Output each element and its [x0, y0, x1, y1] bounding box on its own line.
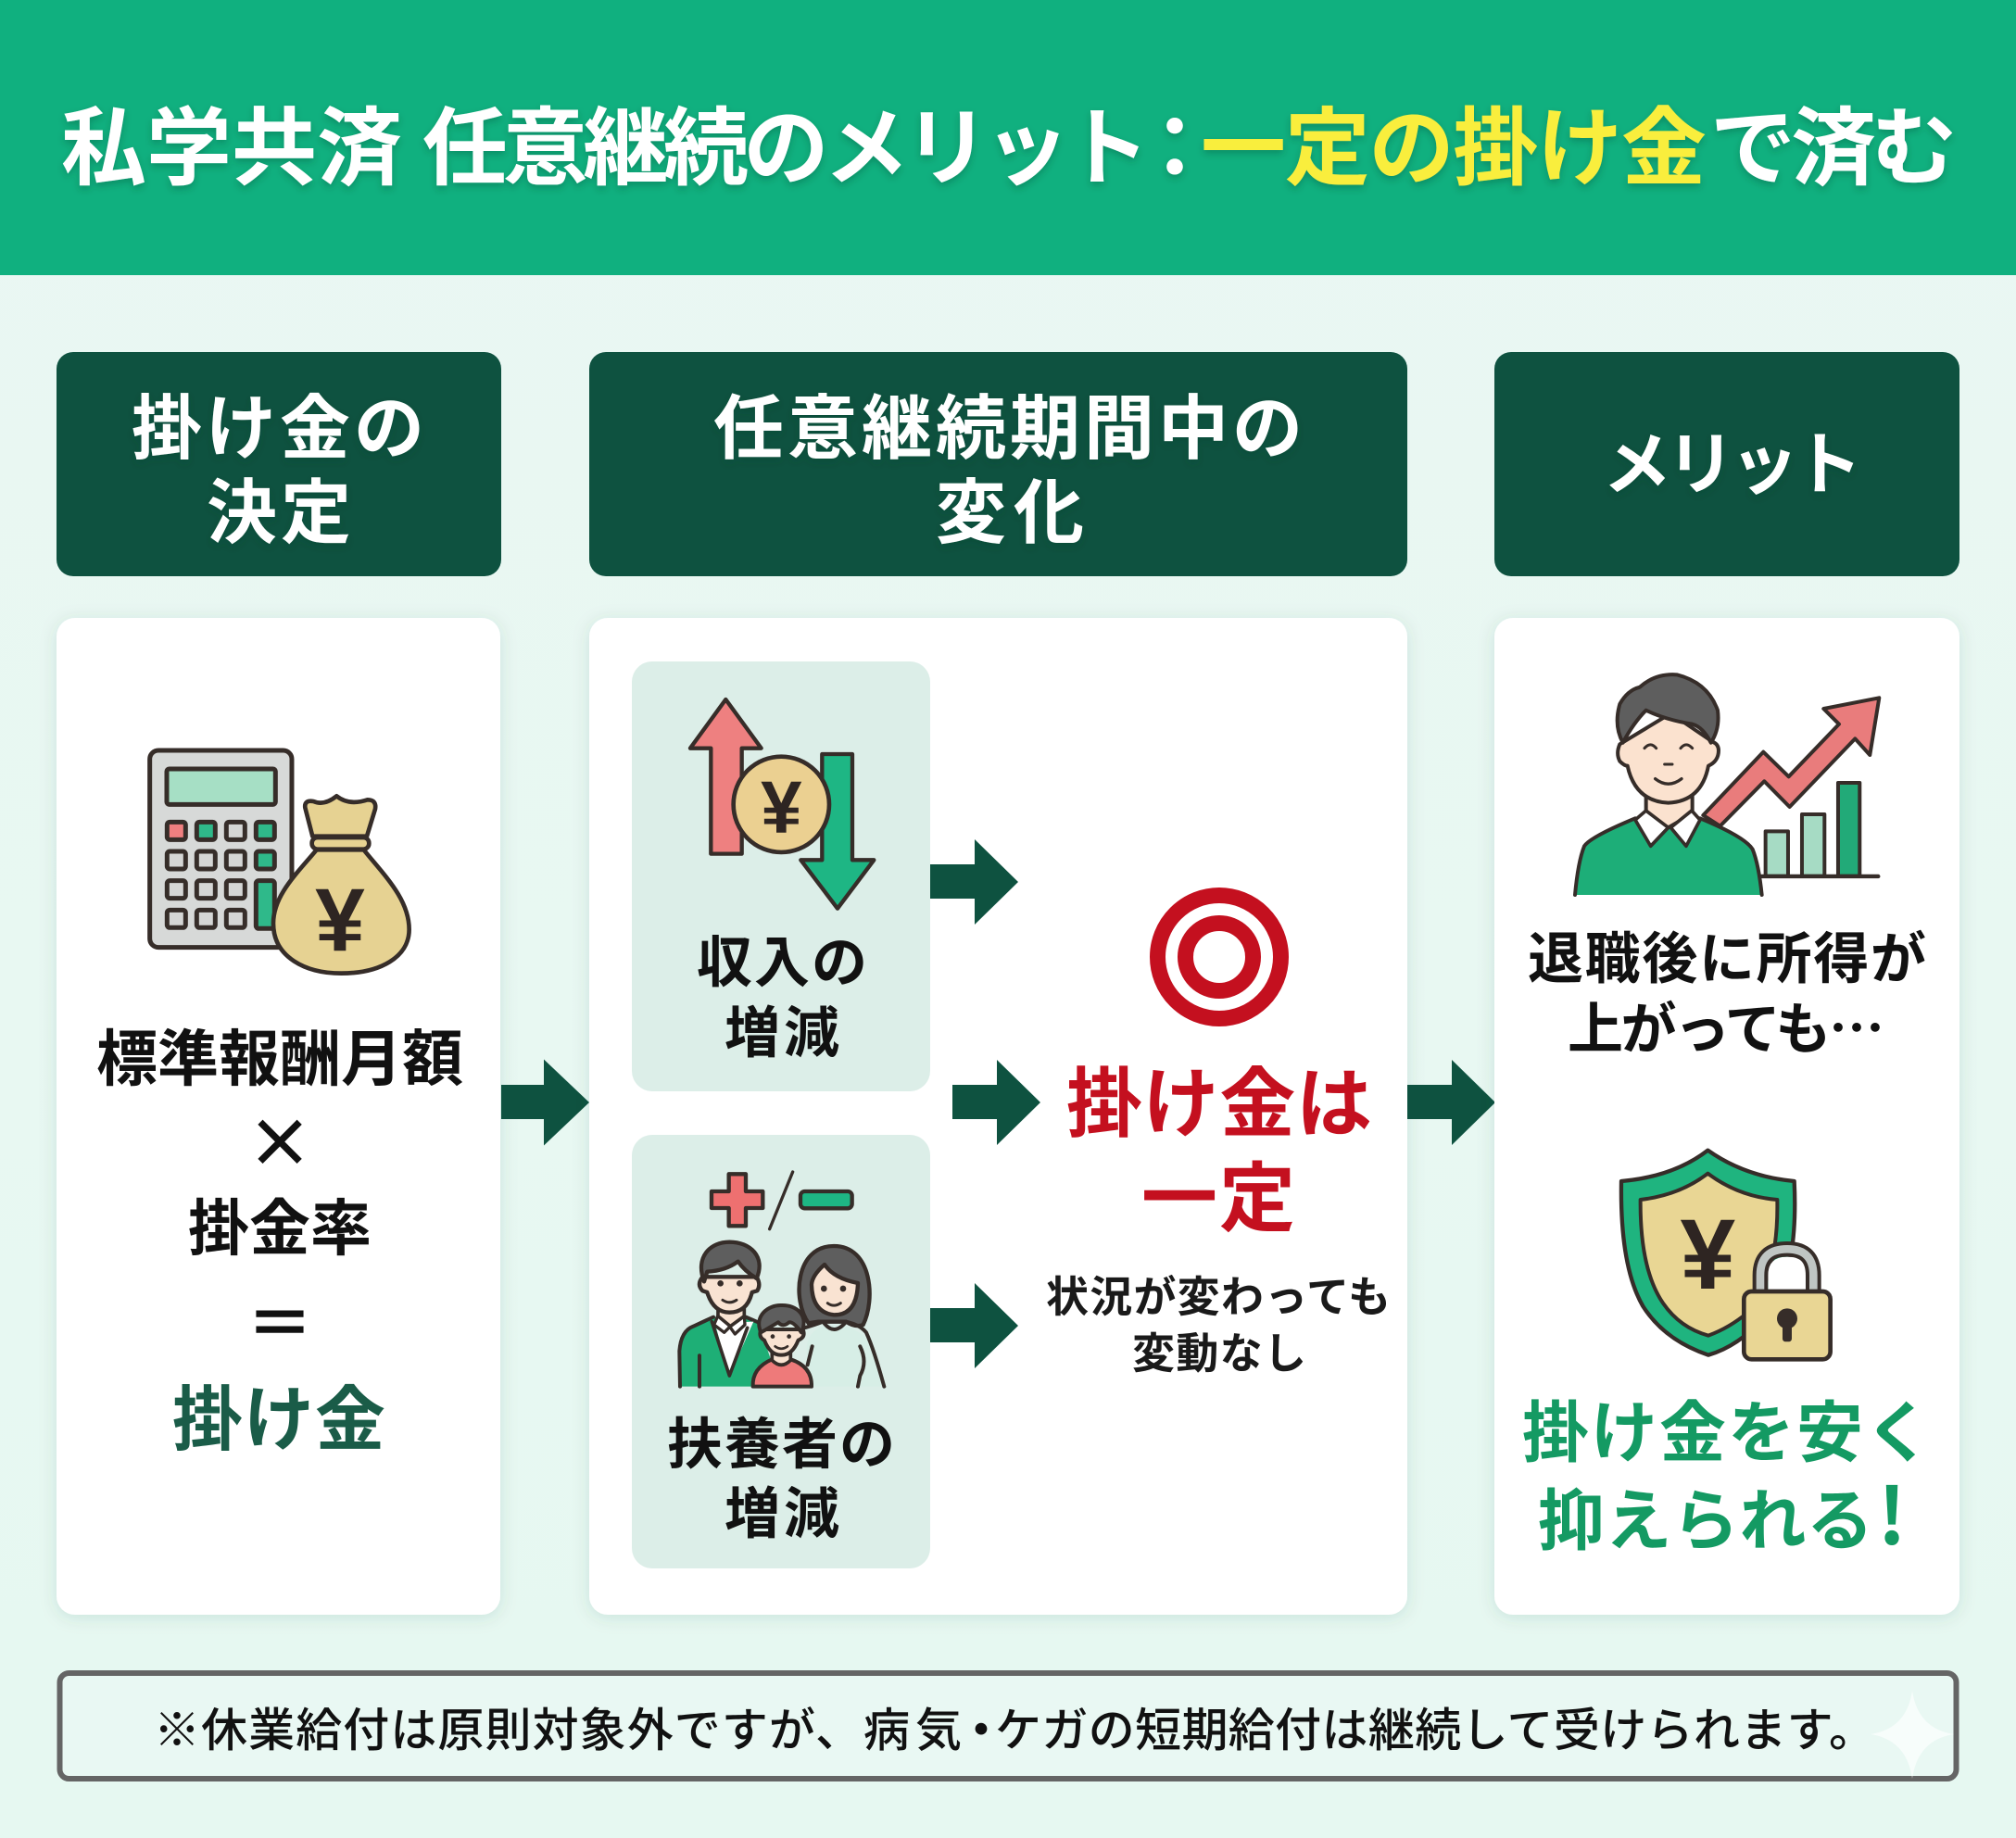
column header: 掛け金の決定: 決定 [207, 456, 351, 558]
title: ： [1132, 80, 1217, 203]
center result text: 変動なし [1132, 1320, 1306, 1381]
icon: calculator and money bag: ¥ [315, 871, 365, 970]
text: 掛け金を安く抑えられる [1522, 1378, 1932, 1567]
icon: sparkle [1871, 1691, 1954, 1779]
note box: 病気 [863, 1693, 962, 1760]
title: 一定の掛け金 [1201, 80, 1707, 203]
arrow: 扶養者 to 一定 [930, 1283, 1018, 1368]
text: 掛け金を安く抑えられる: 抑えられる [1538, 1467, 1873, 1564]
icon: shield with yen and lock [1621, 1151, 1831, 1359]
title: 任意継続のメリット [422, 80, 1150, 203]
icon: income up and down: ¥ [761, 766, 802, 849]
note box: ケガの短期給付は継続して受けられます。 [995, 1693, 1875, 1760]
column header: メリット [1494, 352, 1959, 576]
text: 所得が上がっても: 退職後に所得が [1528, 914, 1926, 995]
panel: 掛け金の決定 [57, 618, 500, 1615]
sub-panel: 収入の増減: 収入の [697, 918, 867, 999]
woman [800, 1246, 870, 1326]
column header: 任意継続期間中の変化: 変化 [936, 456, 1084, 558]
icon: shield with yen and lock: ¥ [1680, 1199, 1735, 1310]
sub-panel: 収入の増減 [632, 661, 930, 1091]
formula text [96, 1010, 463, 1465]
panel: メリット [1494, 618, 1959, 1615]
icon: calculator and money bag [150, 750, 410, 974]
text: 所得が上がっても [1528, 914, 1926, 1065]
arrow: center to 一定 [952, 1060, 1040, 1145]
header band [0, 0, 2016, 275]
sub-panel: 扶養者の増減: 増減 [724, 1469, 839, 1550]
arrow: 変化 to メリット [1407, 1060, 1495, 1145]
title [61, 80, 1957, 203]
arrow: 決定 to 変化 [501, 1060, 589, 1145]
title: 私学共済 [61, 80, 402, 203]
text: 所得が上がっても: 上がっても… [1568, 985, 1884, 1065]
icon: family plus minus [679, 1172, 884, 1387]
text: 掛け金を安く抑えられる: 掛け金を安く [1522, 1378, 1932, 1476]
sub-panel: 収入の増減: 増減 [724, 988, 839, 1069]
formula text: 標準報酬月額 [96, 1010, 463, 1099]
column header: 掛け金の決定: 掛け金の [132, 371, 424, 473]
formula text: × [246, 1089, 313, 1187]
note box [59, 1673, 1957, 1779]
icon: double circle [1158, 895, 1280, 1019]
child [753, 1359, 812, 1387]
man [679, 1317, 771, 1387]
formula text: 掛け金 [172, 1363, 385, 1465]
note box: ・ [958, 1693, 1004, 1760]
center result text: 状況が変わっても [1046, 1264, 1391, 1325]
arrow: 収入 to 一定 [930, 839, 1018, 925]
column header: メリット: メリット [1603, 409, 1862, 509]
column header: 掛け金の決定 [57, 352, 501, 576]
formula text: ＝ [246, 1270, 313, 1367]
formula text: 掛金率 [188, 1179, 372, 1268]
sub-panel: 扶養者の増減 [632, 1135, 930, 1568]
center result text: 掛け金は [1066, 1042, 1372, 1152]
center result text [1046, 1042, 1391, 1381]
title: で済む [1710, 80, 1957, 203]
note box: ※休業給付は原則対象外ですが、 [154, 1693, 862, 1760]
icon: income up and down [690, 699, 874, 909]
center result text: 一定 [1141, 1137, 1295, 1247]
text: 掛け金を安く抑えられる: ! [1877, 1455, 1907, 1567]
panel: 任意継続期間中の変化 [589, 618, 1407, 1615]
icon: person with rising chart [1575, 674, 1879, 895]
column header: 任意継続期間中の変化: 任意継続期間中の [713, 371, 1303, 473]
sub-panel: 扶養者の増減: 扶養者の [667, 1400, 895, 1480]
column header: 任意継続期間中の変化 [589, 352, 1407, 576]
